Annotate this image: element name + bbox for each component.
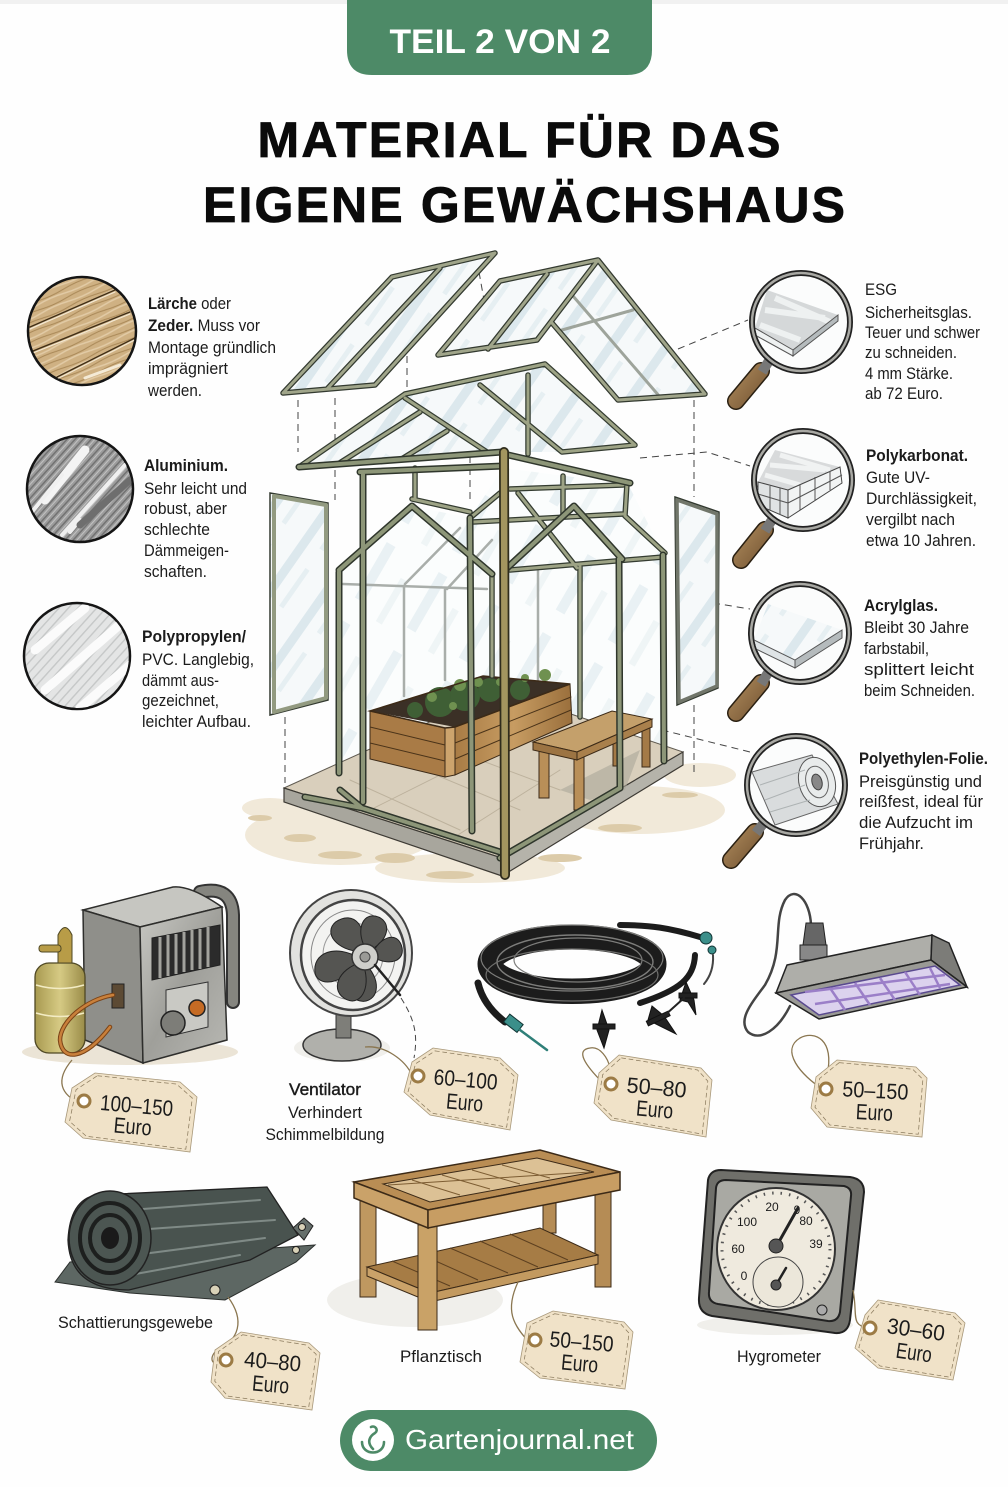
- gas bottle: [35, 928, 85, 1053]
- price tag: heater: 100–150: [99, 1090, 174, 1121]
- text: Polypropylen: gezeichnet,: [142, 692, 219, 710]
- material swatch: Aluminium: [27, 436, 133, 542]
- magnifier: Polyethylen-Folie: [731, 736, 845, 860]
- text: Polykarbonat: [866, 447, 977, 550]
- text: Polyethylen-Folie: Polyethylen-Folie.: [859, 750, 988, 768]
- text: Polykarbonat: etwa 10 Jahren.: [866, 532, 976, 550]
- planting table illustration: [327, 1150, 620, 1330]
- text: Polypropylen: leichter Aufbau.: [142, 713, 251, 731]
- title: [203, 112, 845, 233]
- dial numbers: [731, 1200, 823, 1283]
- price tag: hygrometer: [853, 1290, 965, 1380]
- text: Lärche: [147, 295, 276, 400]
- assembly guide lines: [285, 272, 750, 783]
- text: Schattierungsgewebe: Schattierungsgewebe: [58, 1314, 213, 1332]
- price tag: irrigation hose: 50–80: [626, 1072, 688, 1103]
- text: Ventilator: [266, 1081, 384, 1144]
- text: ESG: zu schneiden.: [865, 344, 957, 362]
- text: Acrylglas: farbstabil,: [864, 640, 929, 658]
- material swatch: Lärche wood: [28, 277, 136, 385]
- front frame bars: [299, 452, 664, 858]
- text: Polypropylen: PVC. Langlebig,: [142, 651, 254, 669]
- price tag: hygrometer: 30–60: [886, 1313, 947, 1346]
- fan blades: [312, 912, 404, 1005]
- fan illustration: [290, 890, 412, 1062]
- price tag: fan: Euro: [445, 1088, 484, 1117]
- text: Aluminium: schlechte: [144, 521, 210, 539]
- header tab: TEIL 2 VON 2: [390, 23, 610, 61]
- bench: [533, 711, 652, 810]
- magnifier: Polykarbonat: [741, 431, 852, 560]
- text: Lärche: Montage gründlich: [148, 339, 276, 357]
- magnifier: Acrylglas: [736, 584, 849, 713]
- price tag: heater: [62, 1060, 197, 1152]
- dial numbers: 9: [794, 1203, 801, 1217]
- icon: sprout logo: [352, 1419, 394, 1461]
- text: Lärche: imprägniert: [148, 360, 228, 378]
- price tag: fan: [365, 998, 518, 1130]
- exploded greenhouse illustration: [242, 253, 750, 883]
- back frame bars: [343, 528, 538, 696]
- footer logo pill: [340, 1410, 657, 1471]
- price tag: planting table: [511, 1282, 633, 1389]
- copper hose: [60, 995, 113, 1055]
- text: Aluminium: schaften.: [144, 563, 207, 581]
- text: Pflanztisch: Pflanztisch: [400, 1348, 482, 1366]
- price tag: grow lamp: Euro: [855, 1099, 894, 1126]
- teal fittings: [504, 932, 716, 1032]
- front corner post: [504, 452, 505, 875]
- price tag: shade cloth: [211, 1297, 320, 1410]
- dial numbers: 80: [799, 1214, 813, 1228]
- lower shelf: [367, 1228, 598, 1293]
- price tag: grow lamp: 50–150: [842, 1076, 909, 1105]
- pipe: [200, 891, 233, 1002]
- text: Polykarbonat: Gute UV-: [866, 469, 930, 487]
- text: Acrylglas: [864, 597, 975, 700]
- text: ESG: Sicherheitsglas.: [865, 304, 972, 322]
- footer logo pill: Gartenjournal.net: [405, 1424, 634, 1455]
- title: EIGENE GEWÄCHSHAUS: [203, 177, 845, 233]
- text: Aluminium: Sehr leicht und: [144, 480, 247, 498]
- side panel left: [270, 493, 328, 715]
- text: Polyethylen-Folie: Preisgünstig und: [859, 773, 982, 791]
- glass walls: [339, 468, 664, 831]
- header tab: [347, 0, 652, 75]
- price tag: grow lamp: [792, 1035, 927, 1137]
- price tag: hygrometer: Euro: [894, 1338, 934, 1367]
- price tag: planting table: 50–150: [549, 1326, 615, 1357]
- shade cloth roll illustration: [55, 1187, 315, 1300]
- text: Acrylglas: splittert leicht: [864, 661, 974, 679]
- heater body: [83, 887, 227, 1063]
- concrete slab: [284, 690, 683, 876]
- roof panel right: [438, 260, 705, 400]
- price tag: planting table: Euro: [560, 1349, 599, 1378]
- raised planting bed: [370, 669, 572, 777]
- title: MATERIAL FÜR DAS: [258, 112, 780, 168]
- text: Polykarbonat: vergilbt nach: [866, 511, 955, 529]
- roof panel left: [283, 253, 495, 393]
- text: Polypropylen: Polypropylen/: [142, 628, 246, 646]
- magnifier: ESG: [736, 273, 850, 401]
- price tag: heater: Euro: [113, 1112, 153, 1141]
- price tag: irrigation hose: Euro: [635, 1095, 674, 1124]
- text: Polyethylen-Folie: Frühjahr.: [859, 835, 924, 853]
- text: Lärche: werden.: [147, 382, 202, 400]
- grow lamp illustration: [744, 894, 967, 1036]
- dial numbers: 20: [765, 1200, 779, 1214]
- text: Ventilator: Ventilator: [289, 1081, 362, 1099]
- text: Polyethylen-Folie: die Aufzucht im: [859, 814, 973, 832]
- text: Polykarbonat: Durchlässigkeit,: [866, 490, 977, 508]
- middle frame bars: [299, 364, 665, 717]
- text: Polypropylen: [142, 628, 254, 731]
- dial numbers: 60: [731, 1242, 745, 1256]
- text: Lärche: Zeder. Muss vor: [148, 317, 260, 335]
- drippers: [593, 982, 697, 1048]
- hygrometer illustration: [697, 1170, 864, 1335]
- text: Ventilator: Schimmelbildung: [266, 1126, 384, 1144]
- text: Aluminium: Aluminium.: [144, 457, 228, 475]
- text: Acrylglas: Acrylglas.: [864, 597, 938, 615]
- text: ESG: ab 72 Euro.: [865, 385, 943, 403]
- text: Acrylglas: Bleibt 30 Jahre: [864, 619, 969, 637]
- price tag: shade cloth: 40–80: [243, 1347, 302, 1376]
- text: ESG: [865, 281, 980, 403]
- dial numbers: 100: [737, 1215, 757, 1229]
- side panel right: [675, 497, 719, 705]
- text: ESG: Teuer und schwer: [865, 324, 980, 342]
- text: Aluminium: [144, 457, 247, 581]
- text: Hygrometer: Hygrometer: [737, 1348, 821, 1366]
- price tag: irrigation hose: [583, 1048, 712, 1137]
- text: Lärche: Lärche oder: [148, 295, 231, 313]
- text: Polyethylen-Folie: [859, 750, 988, 853]
- table top: [354, 1150, 620, 1210]
- middle roof glass: [299, 364, 635, 467]
- text: Aluminium: robust, aber: [144, 500, 227, 518]
- ground sand: [242, 763, 736, 883]
- text: Polyethylen-Folie: reißfest, ideal für: [859, 793, 983, 811]
- text: Acrylglas: beim Schneiden.: [864, 682, 975, 700]
- price tag: fan: 60–100: [433, 1064, 499, 1095]
- dial numbers: 0: [741, 1269, 748, 1283]
- gas heater illustration: [22, 887, 238, 1065]
- material swatch: Polypropylen: [24, 603, 130, 709]
- text: ESG: ESG: [865, 281, 897, 299]
- price tag: shade cloth: Euro: [251, 1370, 290, 1399]
- text: Polykarbonat: Polykarbonat.: [866, 447, 968, 465]
- text: Aluminium: Dämmeigen-: [144, 542, 229, 560]
- text: Ventilator: Verhindert: [288, 1104, 362, 1122]
- irrigation hose illustration: [478, 925, 716, 1050]
- text: Polypropylen: dämmt aus-: [142, 672, 219, 690]
- dial numbers: 39: [809, 1237, 823, 1251]
- text: ESG: 4 mm Stärke.: [865, 365, 953, 383]
